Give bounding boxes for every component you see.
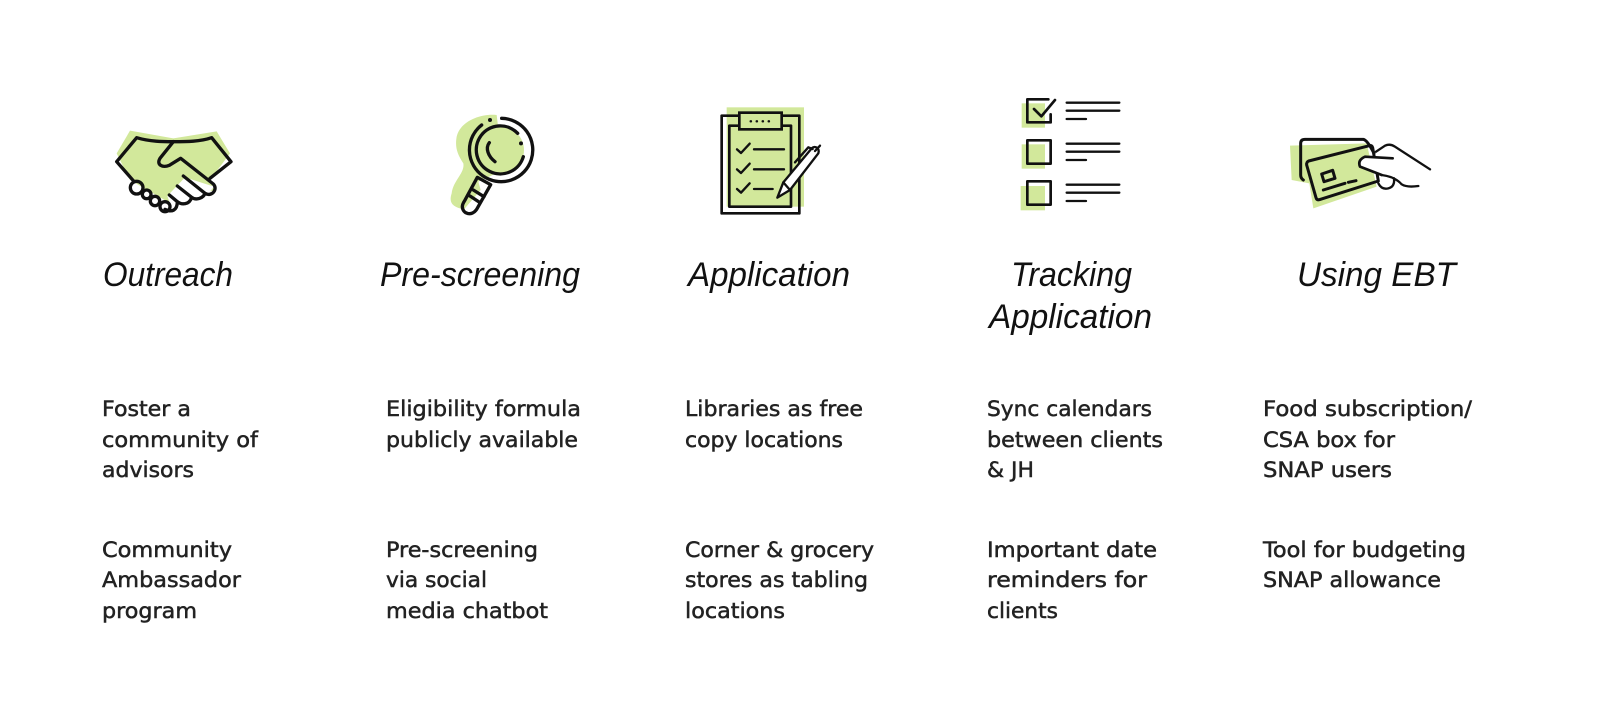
text block: Application idea 1 [685, 397, 863, 453]
heading: Application: Application [686, 256, 850, 294]
text block: Pre-screening idea 1: Eligibility formula [386, 397, 581, 422]
text block: Tracking idea 2 [987, 538, 1157, 624]
heading: Outreach: Outreach [103, 256, 233, 294]
text block: Application idea 2: locations [685, 599, 785, 624]
heading: Tracking Application: Application [987, 298, 1152, 336]
text block: Application idea 1: copy locations [685, 428, 843, 453]
text block: Outreach idea 2: Ambassador [102, 568, 241, 593]
text block: Tracking idea 1: between clients [987, 428, 1163, 453]
text block: Pre-screening idea 2: via social [386, 568, 487, 593]
text block: Outreach idea 2 [102, 538, 241, 624]
icon: checklist [1021, 99, 1119, 210]
text block: Pre-screening idea 2 [386, 538, 548, 624]
text block: Tracking idea 2: Important date [987, 538, 1157, 563]
text block: Outreach idea 2: Community [102, 538, 232, 563]
icon: hand holding EBT cards [1290, 139, 1430, 208]
text block: Using EBT idea 1: Food subscription/ [1263, 397, 1473, 422]
text block: Outreach idea 1: community of [102, 428, 258, 453]
text block: Application idea 1: Libraries as free [685, 397, 863, 422]
text block: Outreach idea 1: advisors [102, 458, 194, 483]
text block: Using EBT idea 1: CSA box for [1263, 428, 1395, 453]
text block: Pre-screening idea 1: publicly available [386, 428, 578, 453]
text block: Outreach idea 1: Foster a [102, 397, 191, 422]
panel: Using EBT column [1262, 139, 1473, 593]
heading: Pre-screening: Pre-screening [380, 256, 580, 294]
text block: Using EBT idea 2: SNAP allowance [1263, 568, 1441, 593]
text block: Pre-screening idea 2: media chatbot [386, 599, 548, 624]
icon: handshake [117, 131, 231, 213]
text block: Application idea 2: Corner & grocery [685, 538, 874, 563]
text block: Tracking idea 1: Sync calendars [987, 397, 1152, 422]
text block: Tracking idea 1 [987, 397, 1163, 483]
text block: Using EBT idea 2: Tool for budgeting [1262, 538, 1466, 563]
panel: Pre-screening column [380, 115, 581, 624]
text block: Application idea 2 [685, 538, 874, 624]
text block: Tracking idea 2: reminders for [987, 568, 1147, 593]
text block: Using EBT idea 2 [1262, 538, 1466, 593]
panel: Application column [685, 107, 874, 624]
text block: Using EBT idea 1 [1263, 397, 1473, 483]
panel: Outreach column [102, 131, 258, 624]
text block: Pre-screening idea 2: Pre-screening [386, 538, 538, 563]
text block: Outreach idea 1 [102, 397, 258, 483]
text block: Outreach idea 2: program [102, 599, 197, 624]
text block: Tracking idea 2: clients [987, 599, 1058, 624]
icon: clipboard with pen [722, 107, 820, 213]
heading: Tracking Application [987, 256, 1152, 336]
icon: magnifying glass [451, 115, 533, 214]
text block: Tracking idea 1: & JH [987, 458, 1034, 483]
heading: Tracking Application: Tracking [1011, 256, 1132, 294]
heading: Using EBT: Using EBT [1297, 256, 1458, 294]
text block: Using EBT idea 1: SNAP users [1263, 458, 1392, 483]
panel: Tracking Application column [987, 99, 1163, 624]
text block: Application idea 2: stores as tabling [685, 568, 868, 593]
text block: Pre-screening idea 1 [386, 397, 581, 453]
